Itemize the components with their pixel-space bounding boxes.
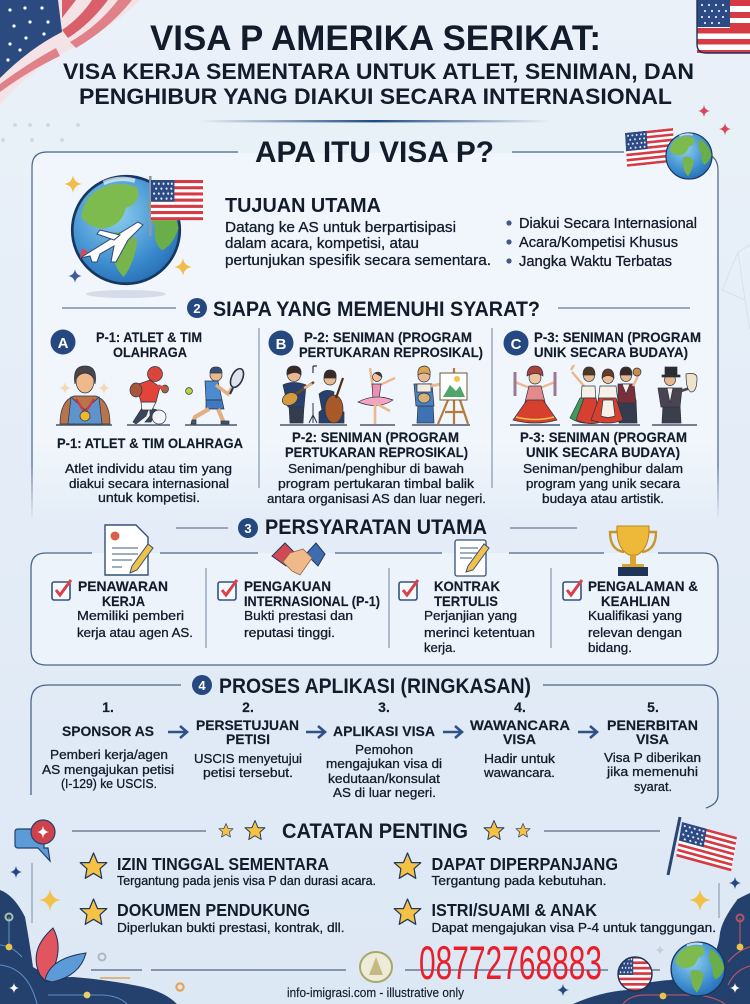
heading: proses aplikasi: PROSES APLIKASI (RINGKASAN) [219, 675, 531, 698]
icon: waving flag [668, 817, 737, 875]
icons: artists [280, 366, 470, 425]
description P-3 [523, 461, 683, 506]
description P-1: untuk kompetisi. [98, 490, 200, 505]
panel: persyaratan utama [31, 553, 718, 665]
arrow 2 [306, 726, 325, 738]
icon: globe with flag and plane [64, 175, 203, 298]
description P-3: program yang unik secara [526, 476, 681, 491]
step 1: SPONSOR AS [62, 723, 154, 739]
item: pengalaman dan keahlian: relevan dengan [588, 625, 682, 640]
step 3: AS di luar negeri. [333, 785, 436, 800]
step 4: 4. [514, 699, 526, 715]
block: tujuan utama: TUJUAN UTAMA [225, 195, 381, 217]
item: pengakuan internasional: INTERNASIONAL (P-1) [244, 593, 380, 609]
step 2: petisi tersebut. [203, 765, 293, 780]
note: dokumen pendukung: DOKUMEN PENDUKUNG [117, 900, 310, 920]
step 4: VISA [503, 731, 536, 747]
item: pengakuan internasional: Bukti prestasi dan [244, 608, 353, 623]
column heading P-2 [299, 329, 483, 360]
item: pengalaman dan keahlian: PENGALAMAN & [588, 578, 698, 594]
block: tujuan utama: pertunjukan spesifik secara sementara. [225, 253, 491, 269]
icon: large globe [671, 942, 725, 996]
item: penawaran kerja: KERJA [102, 593, 145, 609]
icon: chat bubble [15, 820, 55, 861]
step 4: WAWANCARA [470, 717, 570, 733]
heading: persyaratan utama: PERSYARATAN UTAMA [265, 516, 487, 539]
step 5: VISA [636, 731, 669, 747]
note: dapat diperpanjang: Tergantung pada kebutuhan. [432, 873, 606, 888]
column heading P-1: P-1: ATLET & TIM [96, 329, 202, 345]
step 3 [326, 699, 442, 800]
step 4 [470, 699, 570, 780]
title: PENGHIBUR YANG DIAKUI SECARA INTERNASIONAL [79, 84, 672, 109]
column: P-1 [50, 329, 246, 505]
step 2: PERSETUJUAN [196, 717, 299, 733]
item: penawaran kerja: kerja atau agen AS. [77, 625, 193, 640]
item: pengalaman dan keahlian [563, 578, 698, 655]
step 2 [194, 699, 302, 780]
heading: siapa yang memenuhi syarat [62, 298, 690, 321]
heading: persyaratan utama: 3 [244, 521, 252, 536]
item: kontrak tertulis: Perjanjian yang [424, 608, 517, 623]
note: dapat diperpanjang: DAPAT DIPERPANJANG [432, 854, 618, 874]
item: pengakuan internasional: reputasi tinggi. [244, 625, 335, 640]
panel: apa itu visa p [32, 152, 718, 520]
note: izin tinggal sementara: IZIN TINGGAL SEMENTARA [117, 854, 329, 874]
note: izin tinggal sementara [80, 853, 376, 888]
sub heading P-2: P-2: SENIMAN (PROGRAM [292, 429, 459, 445]
column heading P-3 [534, 329, 701, 360]
phone number: 08772768883 [419, 936, 602, 989]
item: pengalaman dan keahlian: Kualifikasi yang [588, 608, 682, 623]
note: istri/suami dan anak: Dapat mengajukan visa P-4 untuk tanggungan. [432, 920, 716, 935]
item: kontrak tertulis: merinci ketentuan [424, 625, 535, 640]
description P-2: Seniman/penghibur di bawah [288, 461, 464, 476]
note: dapat diperpanjang [394, 853, 618, 888]
step 2: 2. [242, 699, 254, 715]
sub heading P-1: P-1: ATLET & TIM OLAHRAGA [57, 435, 243, 451]
heading: catatan penting [72, 820, 660, 843]
sub heading P-3 [520, 429, 687, 460]
heading: siapa yang memenuhi syarat: 2 [193, 301, 201, 316]
block: tujuan utama [225, 195, 491, 269]
note: istri/suami dan anak: ISTRI/SUAMI & ANAK [432, 900, 597, 920]
step 2: PETISI [226, 731, 270, 747]
badge C: C [511, 336, 522, 353]
column heading P-2: PERTUKARAN REPROSIKAL) [299, 344, 483, 360]
column heading P-3: P-3: SENIMAN (PROGRAM [534, 329, 701, 345]
item: kontrak tertulis [399, 578, 535, 655]
footer credit: info-imigrasi.com - illustrative only [287, 986, 465, 1000]
column: P-3 [504, 329, 701, 506]
note: dokumen pendukung [80, 899, 344, 935]
step 5: syarat. [634, 779, 672, 794]
step 2: USCIS menyetujui [194, 751, 302, 766]
title [63, 19, 694, 109]
item: pengakuan internasional: PENGAKUAN [244, 578, 331, 594]
step 5 [604, 699, 701, 794]
decoration: top-right flag [697, 0, 750, 53]
badge A: A [58, 335, 69, 352]
column: P-2 [267, 329, 486, 506]
item: pengakuan internasional [218, 578, 380, 640]
icon: round flag [617, 956, 653, 991]
column heading P-1: OLAHRAGA [113, 344, 187, 360]
heading: persyaratan utama [176, 516, 577, 539]
footer rules [91, 969, 660, 971]
badge B: B [276, 336, 287, 353]
heading: apa itu visa p: APA ITU VISA P? [255, 136, 494, 169]
item: kontrak tertulis: KONTRAK [434, 578, 500, 594]
icon: document [105, 525, 153, 575]
step 1: (I-129) ke USCIS. [61, 776, 157, 791]
description P-2: program pertukaran timbal balik [278, 476, 475, 491]
badge C [504, 330, 528, 356]
icon: trophy [610, 526, 656, 576]
item: penawaran kerja [52, 578, 193, 640]
step 3: 3. [378, 699, 390, 715]
step 4: wawancara. [483, 765, 555, 780]
column heading P-1 [96, 329, 202, 360]
sub heading P-2: PERTUKARAN REPROSIKAL) [285, 444, 468, 460]
arrow 1 [168, 726, 187, 738]
item: penawaran kerja: Memiliki pemberi [77, 608, 184, 623]
decoration: background dots and network [1, 123, 750, 330]
step 1: Pemberi kerja/agen [50, 747, 168, 762]
description P-3: budaya atau artistik. [542, 491, 664, 506]
note: dokumen pendukung: Diperlukan bukti prestasi, kontrak, dll. [117, 920, 344, 935]
step 5: PENERBITAN [607, 717, 698, 733]
arrow 4 [578, 726, 597, 738]
column heading P-2: P-2: SENIMAN (PROGRAM [304, 329, 472, 345]
item: kontrak tertulis: TERTULIS [434, 593, 498, 609]
note: istri/suami dan anak [394, 899, 716, 935]
icons: athletes [56, 366, 246, 425]
panel: proses aplikasi frame [31, 685, 718, 808]
note: izin tinggal sementara: Tergantung pada jenis visa P dan durasi acara. [117, 873, 376, 888]
icon: handshake [272, 543, 325, 575]
description P-2 [267, 461, 486, 506]
decoration: bottom left wave [0, 890, 184, 1004]
bullet list: Acara/Kompetisi Khusus [519, 235, 678, 251]
description P-2: antara organisasi AS dan luar negeri. [267, 491, 486, 506]
block: tujuan utama: Datang ke AS untuk berpartisipasi [225, 220, 456, 236]
heading: siapa yang memenuhi syarat: SIAPA YANG MEMENUHI SYARAT? [213, 298, 540, 321]
decoration: top-left waving flag [0, 0, 140, 105]
title: VISA P AMERIKA SERIKAT: [150, 19, 601, 58]
bullet list [506, 216, 697, 270]
badge A [50, 330, 76, 354]
step 3: Pemohon [355, 742, 413, 757]
arrow 3 [443, 726, 462, 738]
step 3: APLIKASI VISA [333, 723, 435, 739]
icon: small flag and globe [625, 105, 731, 179]
item: pengalaman dan keahlian: KEAHLIAN [601, 593, 670, 609]
badge B [268, 330, 294, 356]
step 5: 5. [647, 699, 659, 715]
step 1: AS mengajukan petisi [42, 762, 174, 777]
sub heading P-3: UNIK SECARA BUDAYA) [526, 444, 680, 460]
decoration: bottom right wave [573, 893, 750, 1004]
sub heading P-2 [285, 429, 468, 460]
description P-3: Seniman/penghibur dalam [523, 461, 683, 476]
bullet list: Jangka Waktu Terbatas [519, 254, 672, 270]
item: penawaran kerja: PENAWARAN [78, 578, 168, 594]
title: VISA KERJA SEMENTARA UNTUK ATLET, SENIMAN, DAN [63, 59, 694, 84]
step 5: jika memenuhi [606, 764, 698, 779]
step 4: Hadir untuk [484, 751, 556, 766]
icons: cultural performers [510, 365, 697, 425]
step 1: 1. [102, 699, 114, 715]
heading: proses aplikasi: 4 [198, 678, 206, 693]
item: kontrak tertulis: kerja. [424, 640, 456, 655]
item: pengalaman dan keahlian: bidang. [588, 640, 632, 655]
step 3: kedutaan/konsulat [328, 771, 440, 786]
heading: catatan penting: CATATAN PENTING [282, 820, 468, 843]
sub heading P-3: P-3: SENIMAN (PROGRAM [520, 429, 687, 445]
icon: contract [455, 540, 489, 576]
block: tujuan utama: dalam acara, kompetisi, atau [225, 236, 419, 252]
step 5: Visa P diberikan [604, 750, 701, 765]
step 1 [42, 699, 174, 791]
description P-1: diakui secara internasional [69, 476, 229, 491]
icon: emblem [360, 952, 392, 982]
column heading P-3: UNIK SECARA BUDAYA) [534, 344, 688, 360]
description P-1: Atlet individu atau tim yang [65, 461, 232, 476]
description P-1 [65, 461, 232, 505]
step 3: mengajukan visa di [326, 756, 442, 771]
bullet list: Diakui Secara Internasional [519, 216, 697, 232]
decoration: side rules and sparkles [10, 863, 741, 996]
